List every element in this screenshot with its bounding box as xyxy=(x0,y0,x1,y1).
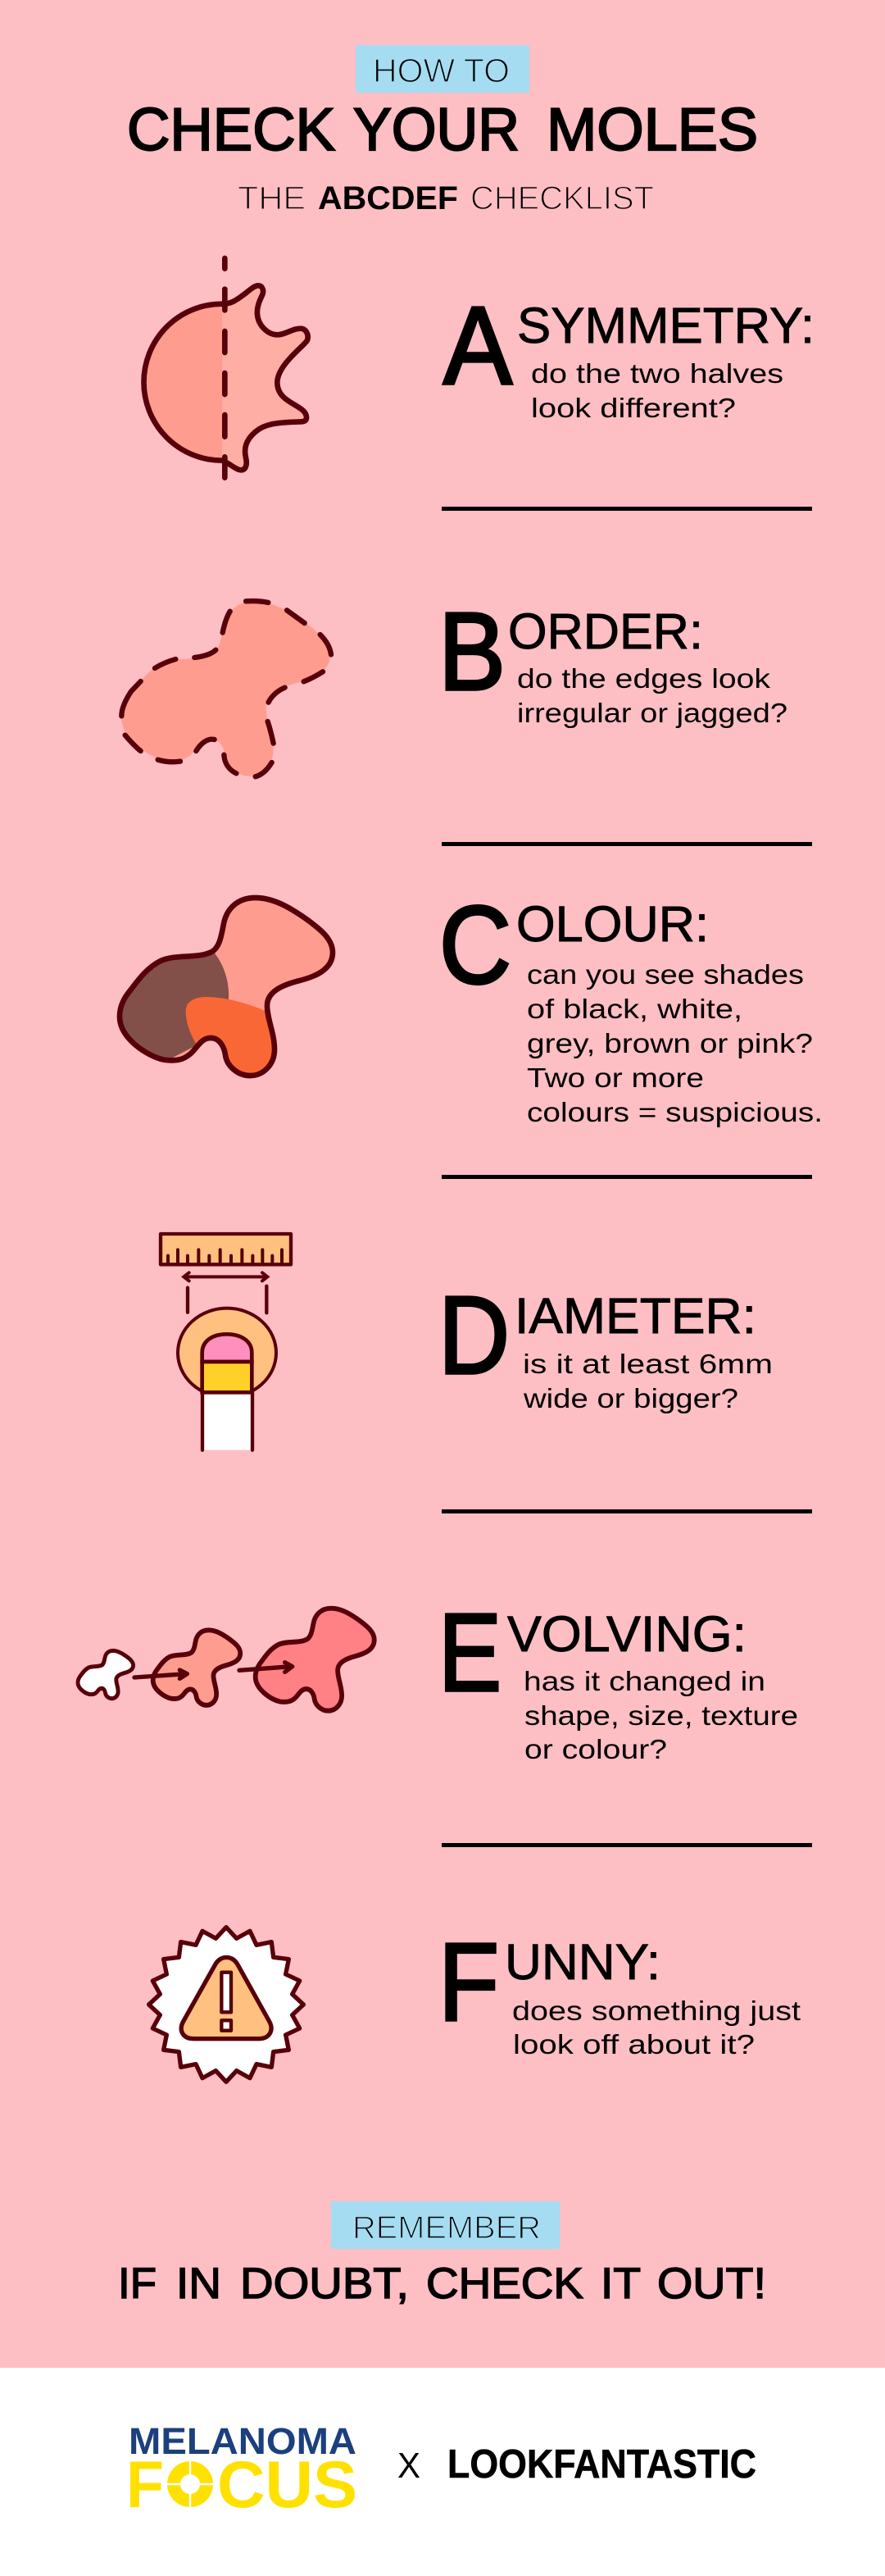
body text: look different? xyxy=(531,393,736,423)
heading: IAMETER: xyxy=(515,1288,756,1344)
tag: how to: HOW TO xyxy=(373,52,510,89)
footer band xyxy=(0,2368,885,2576)
body text xyxy=(517,663,787,728)
subtitle: THE xyxy=(238,180,306,216)
panel: colour xyxy=(98,877,823,1127)
icon: mole with dashed border xyxy=(121,601,331,776)
title xyxy=(127,97,758,163)
title: MOLES xyxy=(547,97,758,163)
body text: is it at least 6mm xyxy=(523,1349,773,1379)
header xyxy=(127,45,758,216)
subtitle: ABCDEF xyxy=(318,180,458,216)
tag: remember: REMEMBER xyxy=(352,2210,541,2246)
body text: of black, white, xyxy=(527,994,742,1024)
logo: Lookfantastic: LOOKFANTASTIC xyxy=(447,2442,756,2487)
logo: Melanoma Focus: CUS xyxy=(217,2448,357,2522)
letter E: E xyxy=(438,1591,502,1714)
body text xyxy=(523,1349,773,1413)
tag: remember xyxy=(331,2201,560,2249)
letter A: A xyxy=(443,284,512,407)
closing message: CHECK xyxy=(426,2260,583,2308)
body text: or colour? xyxy=(524,1734,667,1764)
body text xyxy=(531,358,783,423)
body text: has it changed in xyxy=(524,1666,765,1696)
body text: do the edges look xyxy=(517,663,771,694)
panel: border xyxy=(121,589,787,776)
icon: asymmetric mole xyxy=(143,258,308,478)
closing message: IN xyxy=(176,2260,221,2308)
body text: can you see shades xyxy=(527,959,804,990)
icon: ruler measuring a mole next to a pencil eraser xyxy=(161,1234,291,1450)
icon: multi-coloured mole xyxy=(116,895,336,1079)
heading: OLOUR: xyxy=(516,896,709,952)
body text: look off about it? xyxy=(513,2029,755,2059)
closing message: IT xyxy=(601,2260,641,2308)
panel: funny xyxy=(149,1920,801,2082)
heading: ORDER: xyxy=(508,603,703,659)
tag: how to xyxy=(356,45,529,93)
panel: asymmetry xyxy=(143,258,815,478)
logo: Melanoma Focus: MELANOMA xyxy=(129,2420,356,2462)
body text: Two or more xyxy=(527,1063,704,1093)
closing message: IF xyxy=(118,2260,157,2308)
body text: does something just xyxy=(512,1996,801,2026)
title: YOUR xyxy=(353,97,520,163)
text: X: X xyxy=(397,2446,420,2486)
heading: VOLVING: xyxy=(507,1606,747,1662)
body text xyxy=(524,1666,798,1764)
panel: evolving xyxy=(78,1591,798,1764)
letter F: F xyxy=(438,1920,499,2044)
subtitle xyxy=(238,180,654,216)
closing message: DOUBT, xyxy=(240,2260,409,2308)
closing message xyxy=(118,2260,766,2308)
icon: warning triangle on starburst xyxy=(149,1927,303,2082)
body text: shape, size, texture xyxy=(524,1700,798,1731)
icon: mole growing in three stages xyxy=(78,1609,374,1711)
body text: wide or bigger? xyxy=(523,1383,738,1413)
title: CHECK xyxy=(127,97,335,163)
letter B: B xyxy=(438,589,506,713)
heading: UNNY: xyxy=(505,1934,660,1990)
body text: do the two halves xyxy=(531,358,783,389)
subtitle: CHECKLIST xyxy=(470,180,654,216)
letter C: C xyxy=(439,883,511,1007)
body text xyxy=(527,959,823,1127)
panel: diameter xyxy=(161,1234,773,1450)
letter D: D xyxy=(438,1273,510,1397)
closing message: OUT! xyxy=(657,2260,766,2308)
body text: irregular or jagged? xyxy=(517,698,787,728)
heading: SYMMETRY: xyxy=(517,298,815,353)
body text: colours = suspicious. xyxy=(527,1097,823,1127)
logo: Melanoma Focus: F xyxy=(126,2448,164,2522)
body text xyxy=(512,1996,801,2059)
body text: grey, brown or pink? xyxy=(527,1028,813,1058)
logo: Melanoma Focus xyxy=(126,2420,357,2522)
